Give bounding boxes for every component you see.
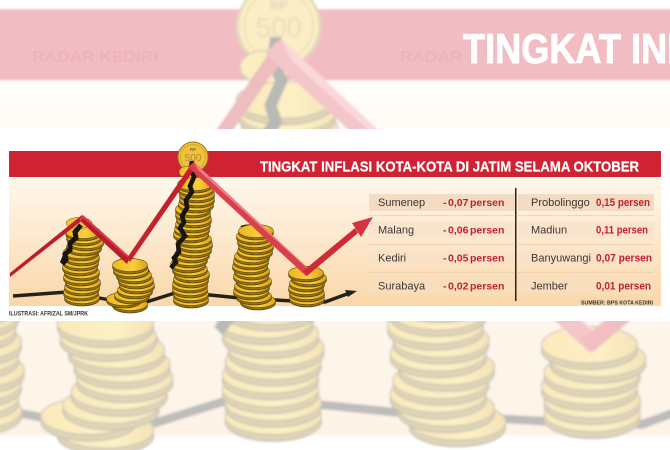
left column values: persen — [470, 280, 504, 292]
left column values: Kediri — [378, 252, 406, 264]
left column values: 0,05 — [448, 252, 469, 264]
source: SUMBER: BPS KOTA KEDIRI — [581, 300, 653, 306]
left column values: 0,07 — [448, 197, 469, 209]
left column values: 0,02 — [448, 280, 469, 292]
right column values: 0,11 persen — [596, 224, 648, 236]
left column values: - — [443, 252, 446, 264]
coin stacks illustration with red trend arrow — [9, 142, 661, 313]
white card — [0, 129, 670, 321]
right column values: Madiun — [531, 224, 567, 236]
left column values — [378, 197, 504, 292]
blurred enlarged background: RADAR — [400, 49, 462, 66]
left column values: persen — [470, 197, 504, 209]
right column values: 0,15 persen — [596, 197, 650, 209]
left column values: - — [443, 197, 446, 209]
right column values — [531, 197, 652, 292]
right column values: Jember — [531, 280, 568, 292]
left column values: 0,06 — [448, 224, 469, 236]
blurred enlarged background: RADAR KEDIRI — [32, 49, 158, 66]
left column values: Malang — [378, 224, 414, 236]
left column values: - — [443, 224, 446, 236]
right column values: Banyuwangi — [531, 252, 591, 264]
left column values: Sumenep — [378, 197, 425, 209]
left column values: - — [443, 280, 446, 292]
right column values: Probolinggo — [531, 197, 590, 209]
right column values: 0,07 persen — [596, 252, 652, 264]
left column values: persen — [470, 252, 504, 264]
left column values: Surabaya — [378, 280, 426, 292]
illustration credit: ILUSTRASI: AFRIZAL SM/JPRK — [9, 312, 89, 318]
panel: inflation table — [369, 188, 654, 301]
right column values: 0,01 persen — [596, 280, 651, 292]
left column values: persen — [470, 224, 504, 236]
